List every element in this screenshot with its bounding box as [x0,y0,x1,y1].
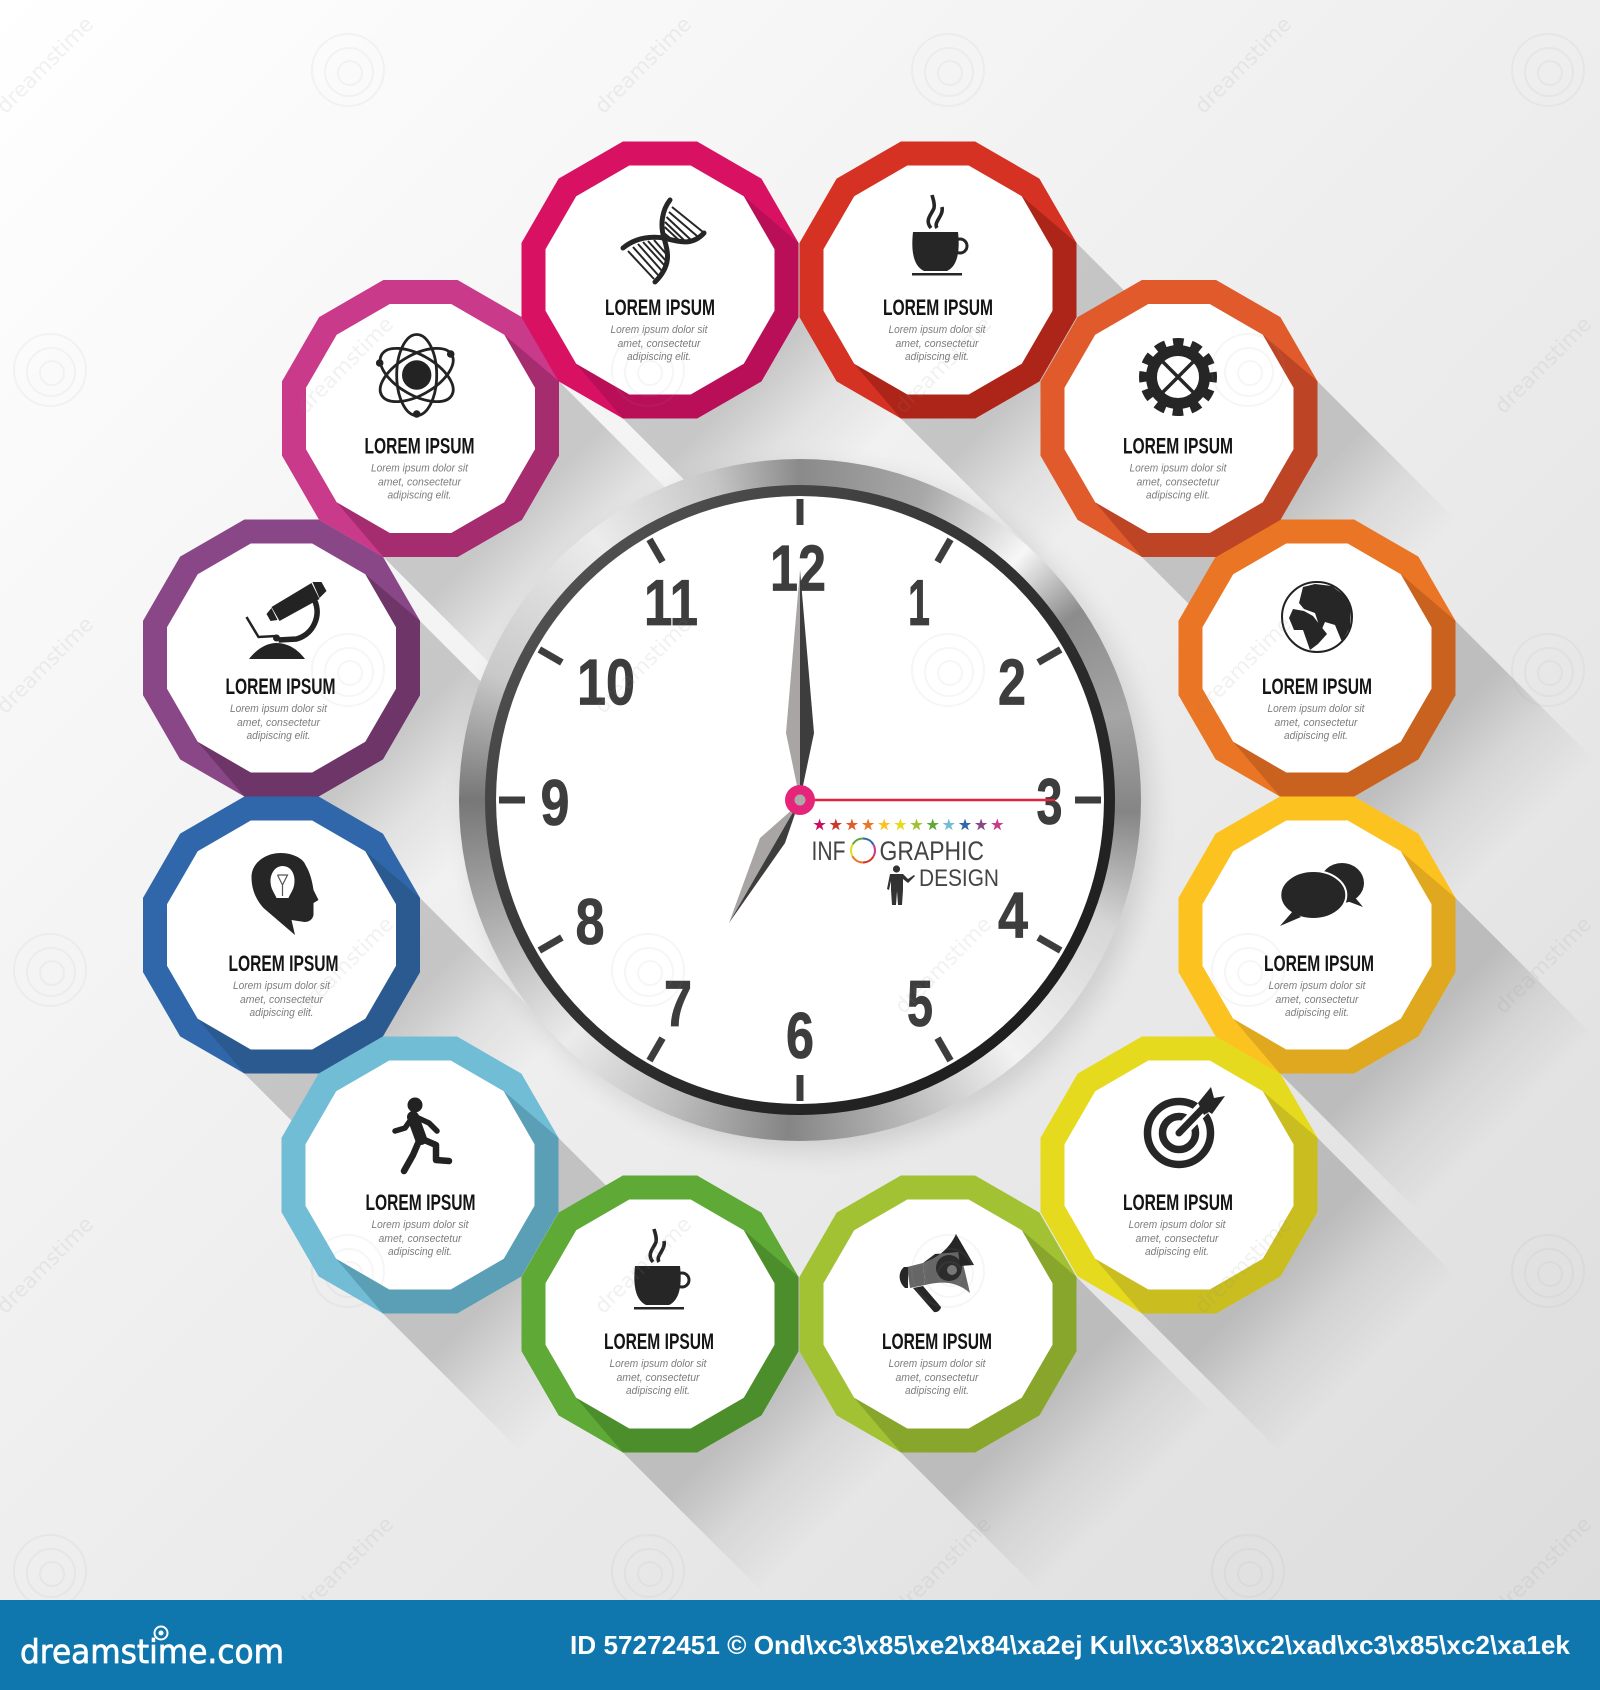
body text: adipiscing elit. [388,490,452,502]
footer logo: dreamstime.com [20,1632,284,1671]
body text: adipiscing elit. [250,1007,314,1019]
body text [888,1358,986,1397]
rainbow stars [813,818,1004,830]
icon: gear [1143,342,1213,412]
hour numerals: 12 [770,532,826,604]
watermark text: dreamstime [1490,912,1596,1018]
logo title: GRAPHIC [880,836,984,866]
watermark text: dreamstime [1190,612,1296,718]
body text: amet, consectetur [618,338,702,350]
body text [372,1219,469,1258]
hub [785,785,815,815]
body text: Lorem ipsum dolor sit [610,324,708,336]
watermark text: dreamstime [1190,1212,1296,1318]
body text [371,462,469,502]
body text: amet, consectetur [616,1372,701,1384]
heading: LOREM IPSUM [228,951,338,976]
body text [1130,462,1227,502]
panel: step pink [522,142,798,418]
body text: amet, consectetur [240,994,324,1006]
hour ticks [499,499,1101,1101]
body text [230,703,328,742]
hour hand [729,800,800,923]
panel: step yellow [1178,796,1456,1074]
watermark text: dreamstime [890,912,996,1018]
hour numerals: 4 [998,878,1028,952]
body text [1268,980,1366,1019]
heading: LOREM IPSUM [366,1190,476,1215]
logo title [812,836,999,892]
icon: speech bubbles [1280,863,1364,926]
watermark text: dreamstime [1490,1512,1596,1618]
body text: amet, consectetur [1276,994,1360,1006]
clock [459,459,1141,1141]
body text: amet, consectetur [378,476,462,488]
body text: Lorem ipsum dolor sit [1268,703,1365,715]
watermark text: dreamstime [292,312,398,418]
heading: LOREM IPSUM [1264,951,1374,976]
panel: step lime [800,1176,1076,1452]
heading: LOREM IPSUM [882,1329,992,1354]
body text: Lorem ipsum dolor sit [888,324,986,336]
body text: amet, consectetur [1136,476,1221,488]
body text: adipiscing elit. [246,730,310,742]
heading: LOREM IPSUM [605,295,715,320]
icon: target with arrow [1148,1087,1225,1164]
body text: Lorem ipsum dolor sit [1268,980,1366,992]
body text: amet, consectetur [896,338,980,350]
watermark text: dreamstime [890,1512,996,1618]
watermark text: dreamstime [292,912,398,1018]
heading: LOREM IPSUM [226,674,336,699]
watermark text: dreamstime [1490,312,1596,418]
body text: amet, consectetur [378,1233,463,1245]
panel: step green [522,1176,798,1452]
icon: runner [395,1098,449,1171]
body text: adipiscing elit. [388,1246,452,1258]
body text: adipiscing elit. [905,351,969,363]
body text: adipiscing elit. [627,351,691,363]
body text: adipiscing elit. [626,1385,690,1397]
clock face [485,485,1115,1115]
panel: step red [800,142,1076,418]
watermark text: dreamstime [292,1512,398,1618]
body text: amet, consectetur [1274,717,1359,729]
panel: step orange-red [1040,280,1318,557]
hour numerals: 11 [644,566,698,639]
hour numerals: 5 [907,967,933,1040]
hour numerals: 8 [576,885,604,958]
watermark text: dreamstime [1190,12,1296,118]
hour numerals: 2 [998,646,1026,718]
body text: amet, consectetur [1136,1233,1220,1245]
clock soft shadow [470,470,1150,1150]
body text: adipiscing elit. [1146,490,1210,502]
icon: head with light bulb [252,853,318,935]
minute hand [786,570,814,800]
heading: LOREM IPSUM [1123,1190,1233,1215]
body text: adipiscing elit. [905,1385,969,1397]
watermark text: dreamstime [890,312,996,418]
body text: Lorem ipsum dolor sit [371,462,469,474]
body text [610,1358,707,1397]
watermark text: dreamstime [590,1212,696,1318]
heading: LOREM IPSUM [1262,674,1372,699]
heading: LOREM IPSUM [364,434,474,458]
hour numerals [540,532,1062,1072]
body text [888,324,986,363]
panel: step magenta [282,280,559,557]
panel: step orange [1178,520,1456,796]
body text [610,324,708,363]
icon: megaphone [900,1234,974,1312]
body text [1268,703,1365,742]
watermark text: dreamstime [590,612,696,718]
body text [1128,1219,1226,1258]
body text: adipiscing elit. [1285,1007,1349,1019]
panel: step purple [143,520,420,796]
body text: Lorem ipsum dolor sit [1128,1219,1226,1231]
body text: adipiscing elit. [1145,1246,1209,1258]
body text: Lorem ipsum dolor sit [230,703,328,715]
body text: amet, consectetur [896,1372,980,1384]
metallic rim [459,459,1141,1141]
body text: Lorem ipsum dolor sit [1130,462,1227,474]
logo title: DESIGN [919,865,999,892]
icon: coffee cup [912,195,967,276]
hour numerals: 9 [540,766,570,839]
logo title: INF [812,836,846,866]
icon: atom [372,334,462,418]
panel: step light blue [282,1036,558,1314]
icon: presenter figure [887,865,915,905]
icon: globe [1282,582,1352,652]
icon: coffee cup [634,1229,689,1310]
heading: LOREM IPSUM [883,295,993,320]
icon: DNA helix [623,200,704,282]
body text: Lorem ipsum dolor sit [233,980,331,992]
panel: step blue [143,796,420,1074]
body text [233,980,331,1019]
panel: step yellow-green [1040,1036,1318,1314]
body text: Lorem ipsum dolor sit [372,1219,469,1231]
icon: microscope [246,582,326,659]
body text: Lorem ipsum dolor sit [610,1358,707,1370]
watermark text: dreamstime [590,12,696,118]
hour numerals: 10 [577,646,635,718]
second hand [800,799,1055,801]
hour numerals: 7 [664,967,692,1040]
long shadows [244,243,1595,1592]
hour numerals: 1 [908,566,930,639]
hour numerals: 3 [1036,765,1062,838]
body text: adipiscing elit. [1284,730,1348,742]
heading: LOREM IPSUM [1123,434,1233,458]
body text: amet, consectetur [237,717,321,729]
footer banner [0,1600,1600,1690]
hour numerals: 6 [786,999,814,1072]
footer credit: ID 57272451 © Ond\xc3\x85\xe2\x84\xa2ej Kul\xc3\x83\xc2\xad\xc3\x85\xc2\xa1ek [570,1630,1571,1660]
body text: Lorem ipsum dolor sit [888,1358,986,1370]
heading: LOREM IPSUM [604,1329,714,1354]
